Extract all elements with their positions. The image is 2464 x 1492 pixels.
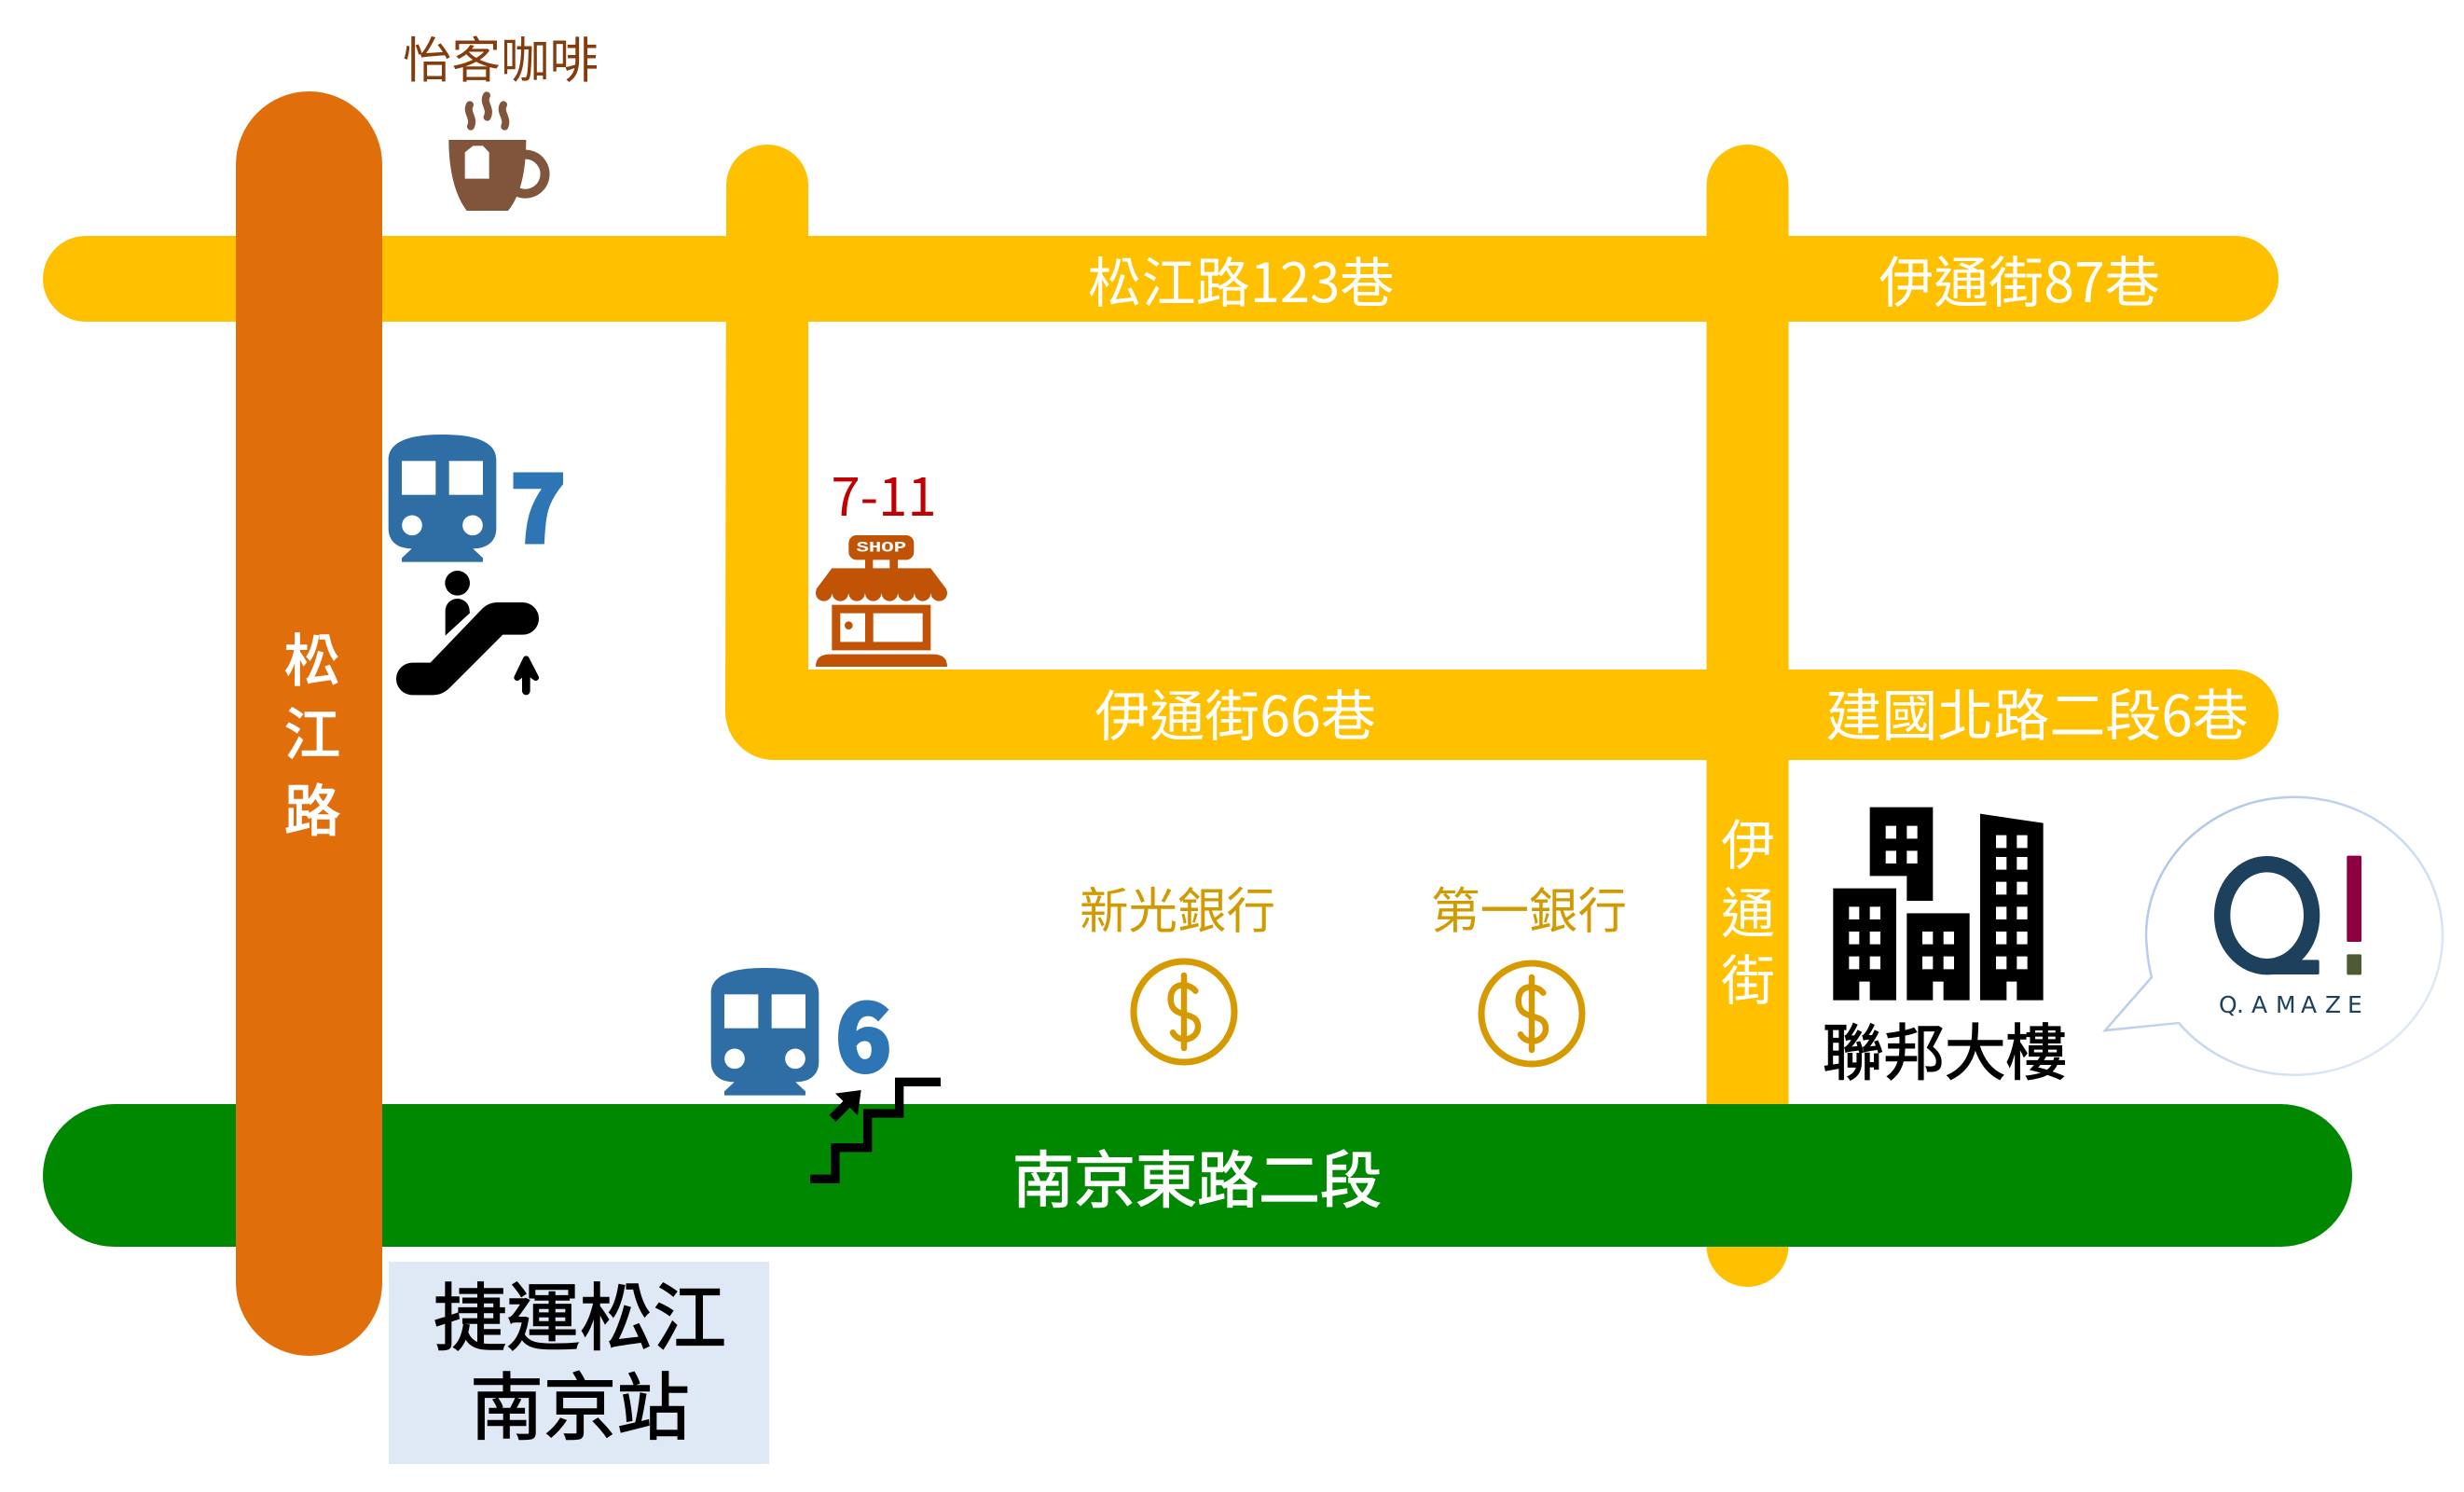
road label: 伊通街87巷: 伊通街87巷	[1879, 239, 2160, 318]
icon: bank coin 新光	[1134, 961, 1234, 1062]
road label: 伊通街 vertical: 伊	[1721, 802, 1775, 880]
road label: 松江路123巷: 松江路123巷	[1088, 240, 1394, 318]
icon: train exit 6	[711, 968, 819, 1096]
icon: bank coin 第一	[1481, 963, 1582, 1064]
road: 松江路 orange vertical	[236, 91, 382, 1356]
label: 新光銀行: 新光銀行	[1080, 872, 1275, 943]
road label: 伊通街 vertical: 街	[1721, 937, 1775, 1015]
logo: Q	[2223, 864, 2319, 974]
road label: 南京東路二段: 南京東路二段	[1012, 1131, 1382, 1221]
label: exit number 7: 7	[510, 435, 566, 570]
logo: exclamation mark	[2347, 856, 2361, 974]
road label: 松江路: 路	[284, 767, 340, 848]
road: 松江路123巷 yellow horizontal	[43, 236, 2278, 322]
label: exit number 6: 6	[835, 964, 891, 1098]
icon: shop: SHOP	[856, 540, 906, 557]
icon: buildings	[1833, 808, 2044, 1001]
label: 怡客咖啡: 怡客咖啡	[403, 21, 599, 92]
road label: 伊通街 vertical: 通	[1721, 870, 1775, 948]
icon: coffee cup	[448, 95, 545, 211]
label: 聯邦大樓: 聯邦大樓	[1823, 1003, 2067, 1092]
station name background	[389, 1262, 769, 1464]
station name line 1: 捷運松江	[434, 1259, 726, 1365]
label: 7-11: 7-11	[832, 456, 936, 532]
speech bubble with Q.AMAZE logo	[2105, 797, 2443, 1075]
station name line 2: 南京站	[470, 1348, 690, 1455]
road label: 松江路	[284, 616, 340, 848]
road: 伊通街66巷 yellow with bend	[725, 145, 2278, 760]
road: 南京東路二段 green	[43, 1104, 2352, 1247]
road label: 松江路: 松	[284, 616, 340, 698]
label: 第一銀行: 第一銀行	[1431, 872, 1627, 943]
road label: 建國北路二段6巷: 建國北路二段6巷	[1825, 671, 2249, 753]
road label: 伊通街66巷: 伊通街66巷	[1094, 672, 1376, 752]
icon: shop	[816, 535, 947, 667]
bubble outline	[2105, 797, 2443, 1075]
road label: 松江路: 江	[284, 690, 340, 771]
icon: stairs up	[810, 1082, 941, 1179]
panel: station name	[389, 1259, 769, 1464]
icon: train exit 7	[389, 435, 496, 562]
road label: 伊通街 vertical	[1721, 802, 1775, 1015]
road: 伊通街 yellow vertical	[1706, 145, 1788, 1287]
icon: escalator up	[396, 571, 539, 695]
logo text: Q. AMAZE: Q.AMAZE	[2219, 991, 2362, 1018]
